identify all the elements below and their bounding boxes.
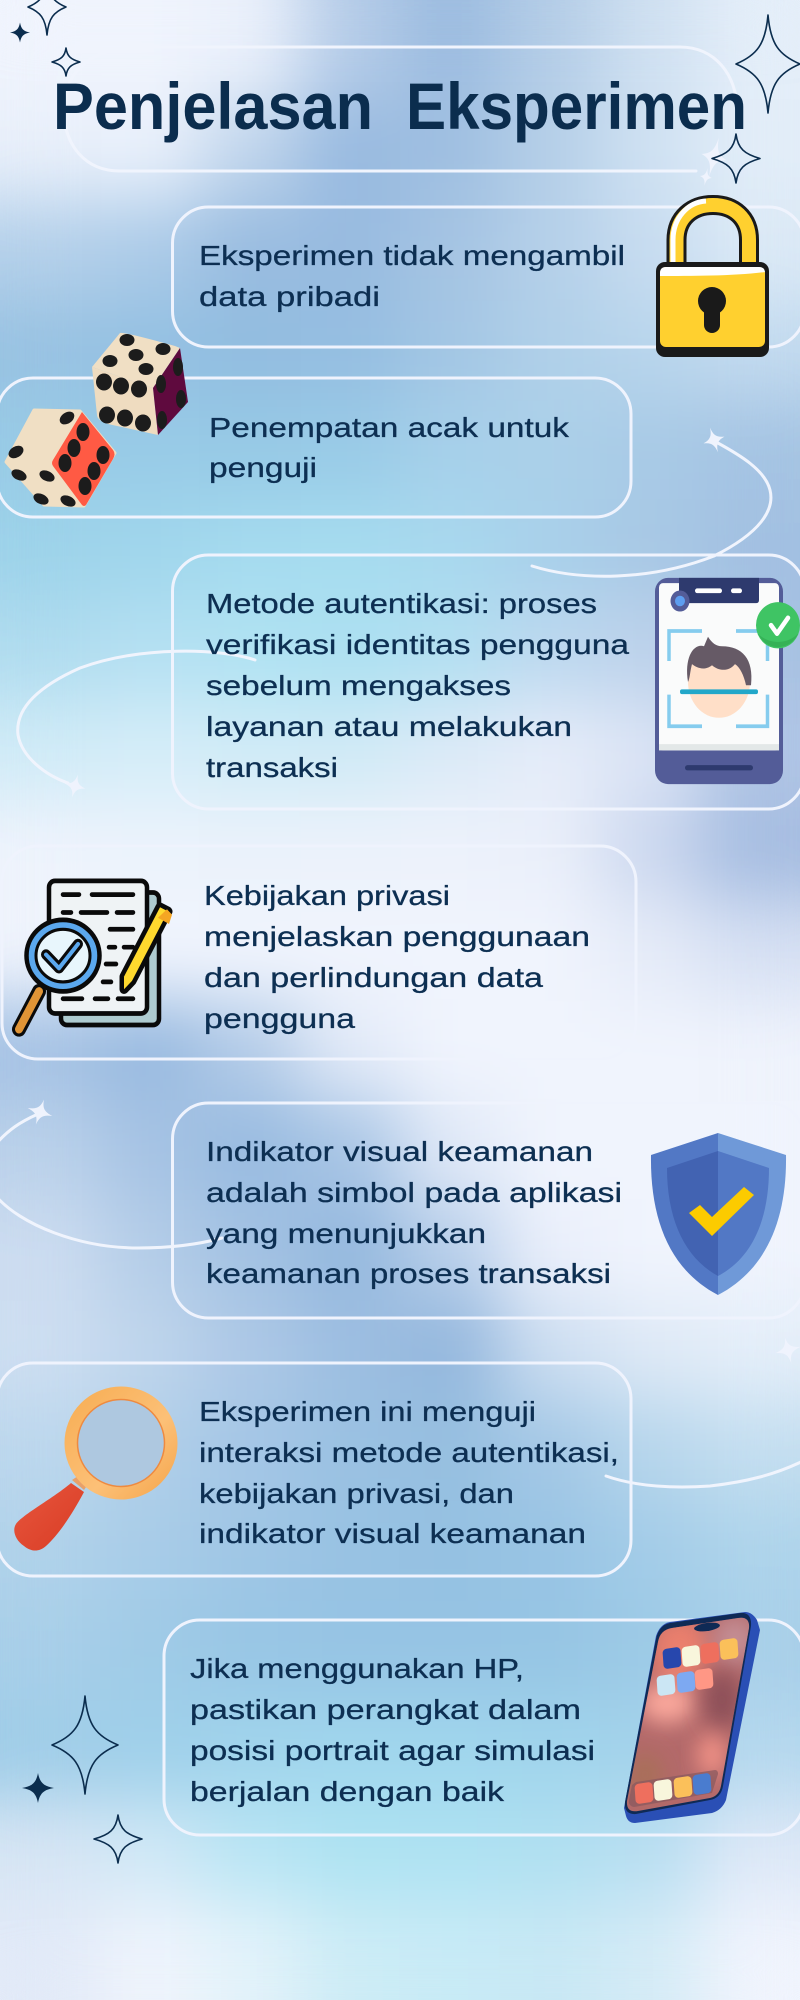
icon: large outline star bottom left [52,1696,118,1794]
text: card 7 [190,1653,595,1807]
text: card 3: sebelum mengakses [206,670,511,701]
text: card 3: verifikasi identitas pengguna [206,629,630,660]
decorative arrow curve: left of card 5 [0,1096,222,1248]
icon: phone face scan [655,578,800,784]
icon: large outline star top right [736,15,800,113]
decorative arrow curve: right of card 6 [606,1334,800,1487]
text: card 5: adalah simbol pada aplikasi [206,1177,622,1208]
text: card 1: data pribadi [199,281,380,312]
panel: card 7 [164,1620,800,1835]
panel: card 2 [0,378,631,517]
text: card 2: penguji [209,452,317,483]
title panel outline [64,47,737,171]
icon: outline star top left [28,0,66,35]
text: card 4 [204,880,590,1034]
icon: smartphone app screen [620,1610,760,1823]
text: card 5: keamanan proses transaksi [206,1258,611,1289]
panel: card 1 [172,207,800,347]
icon: security shield [651,1133,786,1295]
text: card 4: menjelaskan penggunaan [204,921,590,952]
sparkle: small white star near title panel [699,167,713,187]
icon: filled star bottom left [22,1773,54,1803]
icon: document with magnifier and pencil [19,881,172,1029]
text: card 2: Penempatan acak untuk [209,412,570,443]
text: card 6: interaksi metode autentikasi, [199,1437,619,1468]
text: card 1 [199,240,625,312]
die: bottom left [6,409,115,509]
text: card 7: berjalan dengan baik [190,1776,505,1807]
text: card 3: layanan atau melakukan [206,711,572,742]
text: card 5 [206,1136,622,1289]
text: card 7: posisi portrait agar simulasi [190,1735,595,1766]
icon: outline star under title [712,134,760,183]
panel: card 6 [0,1363,631,1576]
text: card 5: Indikator visual keamanan [206,1136,593,1167]
text: card 6: indikator visual keamanan [199,1518,586,1549]
text: card 6: Eksperimen ini menguji [199,1396,536,1427]
text: card 1: Eksperimen tidak mengambil [199,240,625,271]
text: card 4: pengguna [204,1003,356,1034]
icon: dice pair [6,333,188,509]
text: card 4: Kebijakan privasi [204,880,450,911]
text: card 6 [199,1396,619,1549]
sparkle: white star near title panel [697,134,731,180]
panel: card 5 [172,1103,800,1318]
icon: padlock [656,201,769,357]
text: card 5: yang menunjukkan [206,1218,486,1249]
text: card 3 [206,588,630,783]
text: card 3: Metode autentikasi: proses [206,588,597,619]
title [53,69,747,143]
die: top right [92,333,188,435]
icon: 3D magnifying glass [14,1393,171,1551]
icon: small outline star top left [52,48,80,76]
text: card 2 [209,412,570,483]
text: card 3: transaksi [206,752,338,783]
icon: filled star top left [10,22,30,42]
text: card 7: Jika menggunakan HP, [190,1653,524,1684]
panel: card 4 [2,846,636,1059]
decorative arrow curve: left of card 3 [18,651,255,800]
panel: card 3 [172,555,800,809]
icon: small outline star bottom left [94,1815,142,1863]
decorative arrow curve: right of card 2 [532,424,771,576]
text: card 6: kebijakan privasi, dan [199,1478,514,1509]
text: card 7: pastikan perangkat dalam [190,1694,581,1725]
title: Penjelasan [53,69,373,143]
text: card 4: dan perlindungan data [204,962,544,993]
title: Eksperimen [406,69,747,143]
